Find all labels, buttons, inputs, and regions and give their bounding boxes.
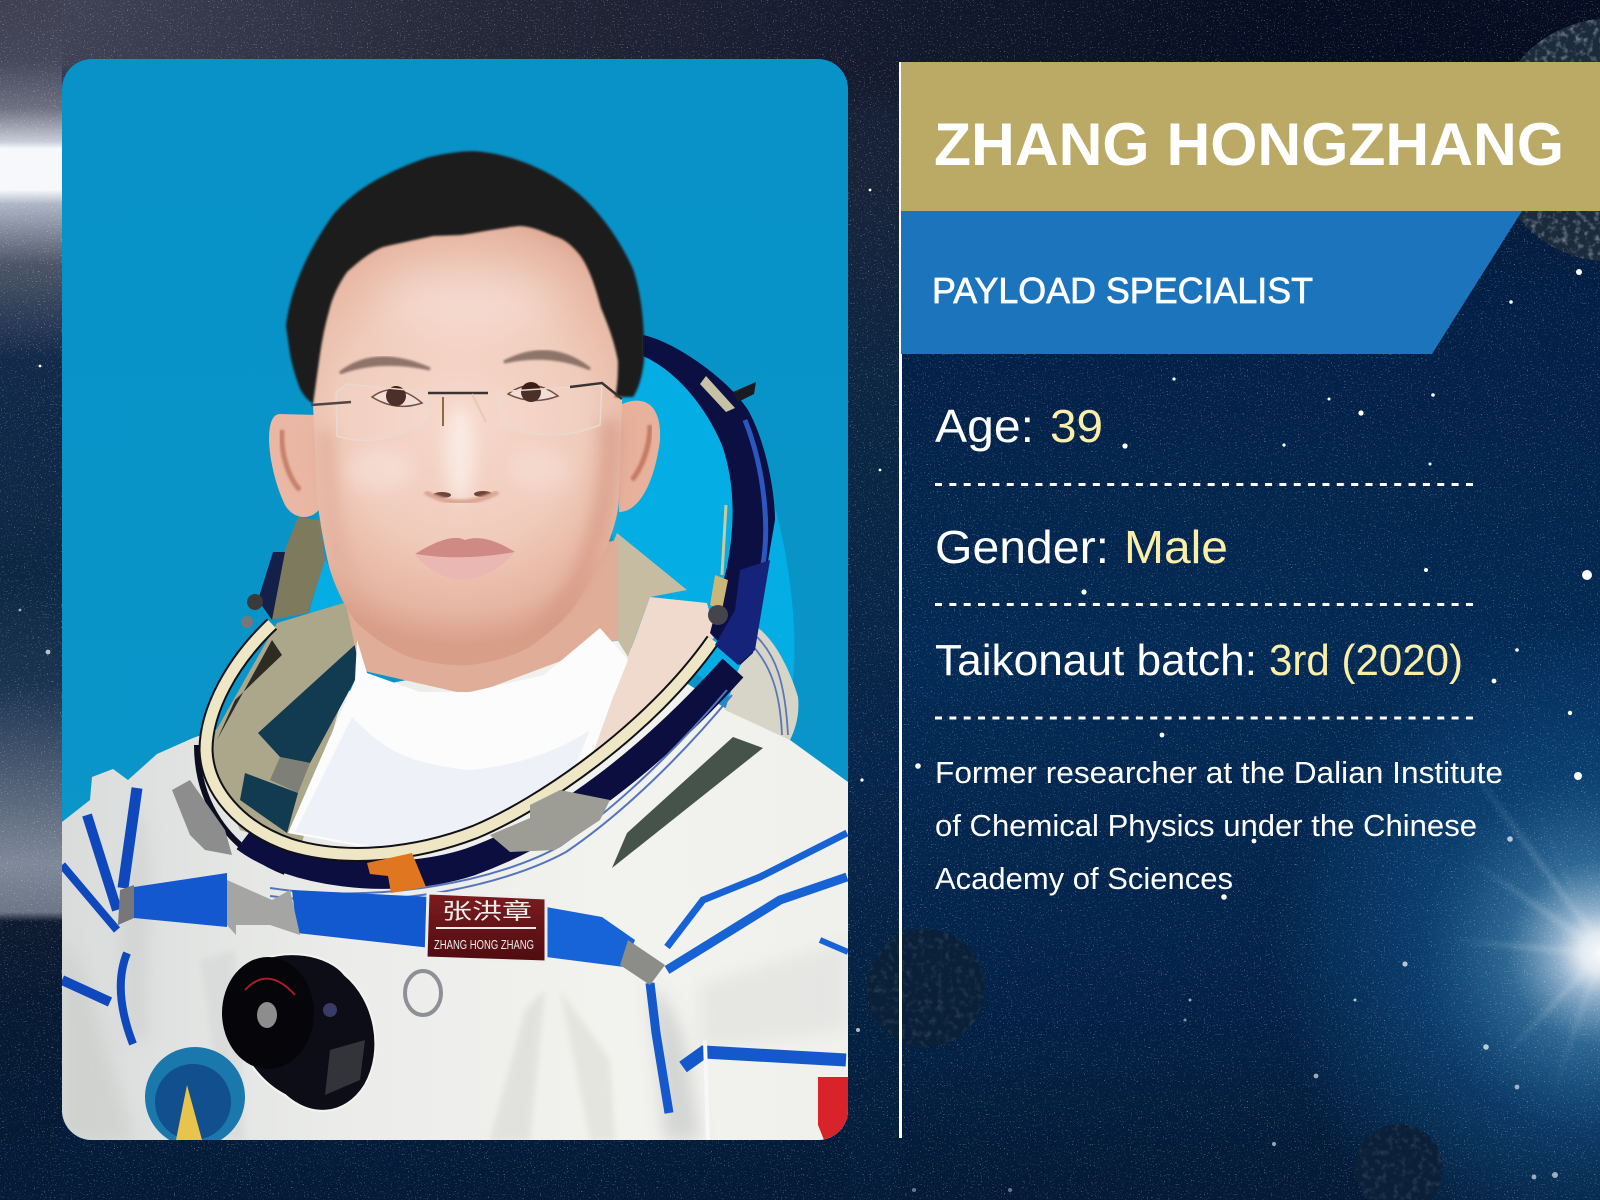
hair bbox=[286, 151, 644, 404]
planet: middle bbox=[867, 929, 985, 1047]
eyes bbox=[372, 382, 558, 406]
white turtleneck bbox=[288, 628, 628, 850]
name tag: ZHANG HONG ZHANG bbox=[434, 937, 534, 952]
glasses bbox=[311, 383, 622, 440]
nose bbox=[425, 491, 498, 502]
gender row bbox=[935, 521, 1228, 573]
beige collar bbox=[614, 533, 687, 657]
planet: bottom bbox=[1355, 1124, 1443, 1200]
vertical white divider bbox=[899, 62, 902, 1138]
green zipper bbox=[612, 737, 763, 868]
taikonaut batch row: 3rd (2020) bbox=[1269, 636, 1463, 685]
lips bbox=[415, 538, 515, 580]
taikonaut batch row: Taikonaut batch: bbox=[935, 636, 1257, 685]
name tag: 张洪章 bbox=[442, 899, 532, 924]
age row: 39 bbox=[1050, 400, 1103, 452]
role banner: PAYLOAD SPECIALIST bbox=[932, 270, 1313, 311]
blue sleeve stripes bbox=[62, 788, 848, 1113]
spacesuit body bbox=[62, 640, 848, 1140]
taikonaut batch row bbox=[935, 636, 1463, 685]
role banner bbox=[901, 211, 1522, 354]
age row: Age: bbox=[935, 400, 1034, 452]
biography text: Former researcher at the Dalian Institute bbox=[935, 755, 1503, 790]
gender row: Male bbox=[1124, 521, 1228, 573]
left hood strap bbox=[241, 517, 325, 628]
name banner bbox=[901, 62, 1600, 211]
name tag bbox=[426, 893, 546, 962]
ring clasps bbox=[172, 605, 728, 855]
photo background bbox=[62, 59, 848, 1140]
flag patch bbox=[818, 1077, 848, 1140]
biography text: Academy of Sciences bbox=[935, 861, 1233, 896]
portrait photo panel bbox=[62, 59, 848, 1147]
lower helmet ring bbox=[197, 624, 733, 901]
chest ring bbox=[405, 971, 441, 1015]
black chest valve bbox=[222, 954, 375, 1111]
inner collar bbox=[214, 603, 356, 841]
biography text: of Chemical Physics under the Chinese bbox=[935, 808, 1477, 843]
blue chest strap bbox=[118, 873, 665, 985]
biography text bbox=[935, 755, 1503, 896]
orange clip bbox=[367, 853, 426, 893]
name banner: ZHANG HONGZHANG bbox=[934, 111, 1564, 178]
eyebrows bbox=[340, 358, 430, 373]
pink padded collar bbox=[593, 597, 716, 753]
planet: top right bbox=[1518, 18, 1600, 262]
age row bbox=[935, 400, 1103, 452]
astronaut center badge bbox=[145, 1047, 245, 1147]
gender row: Gender: bbox=[935, 521, 1109, 573]
ears bbox=[269, 414, 322, 517]
neck bbox=[345, 540, 617, 695]
upper helmet ring bbox=[643, 335, 775, 665]
helmet back hood bbox=[725, 627, 798, 740]
face bbox=[312, 224, 622, 666]
